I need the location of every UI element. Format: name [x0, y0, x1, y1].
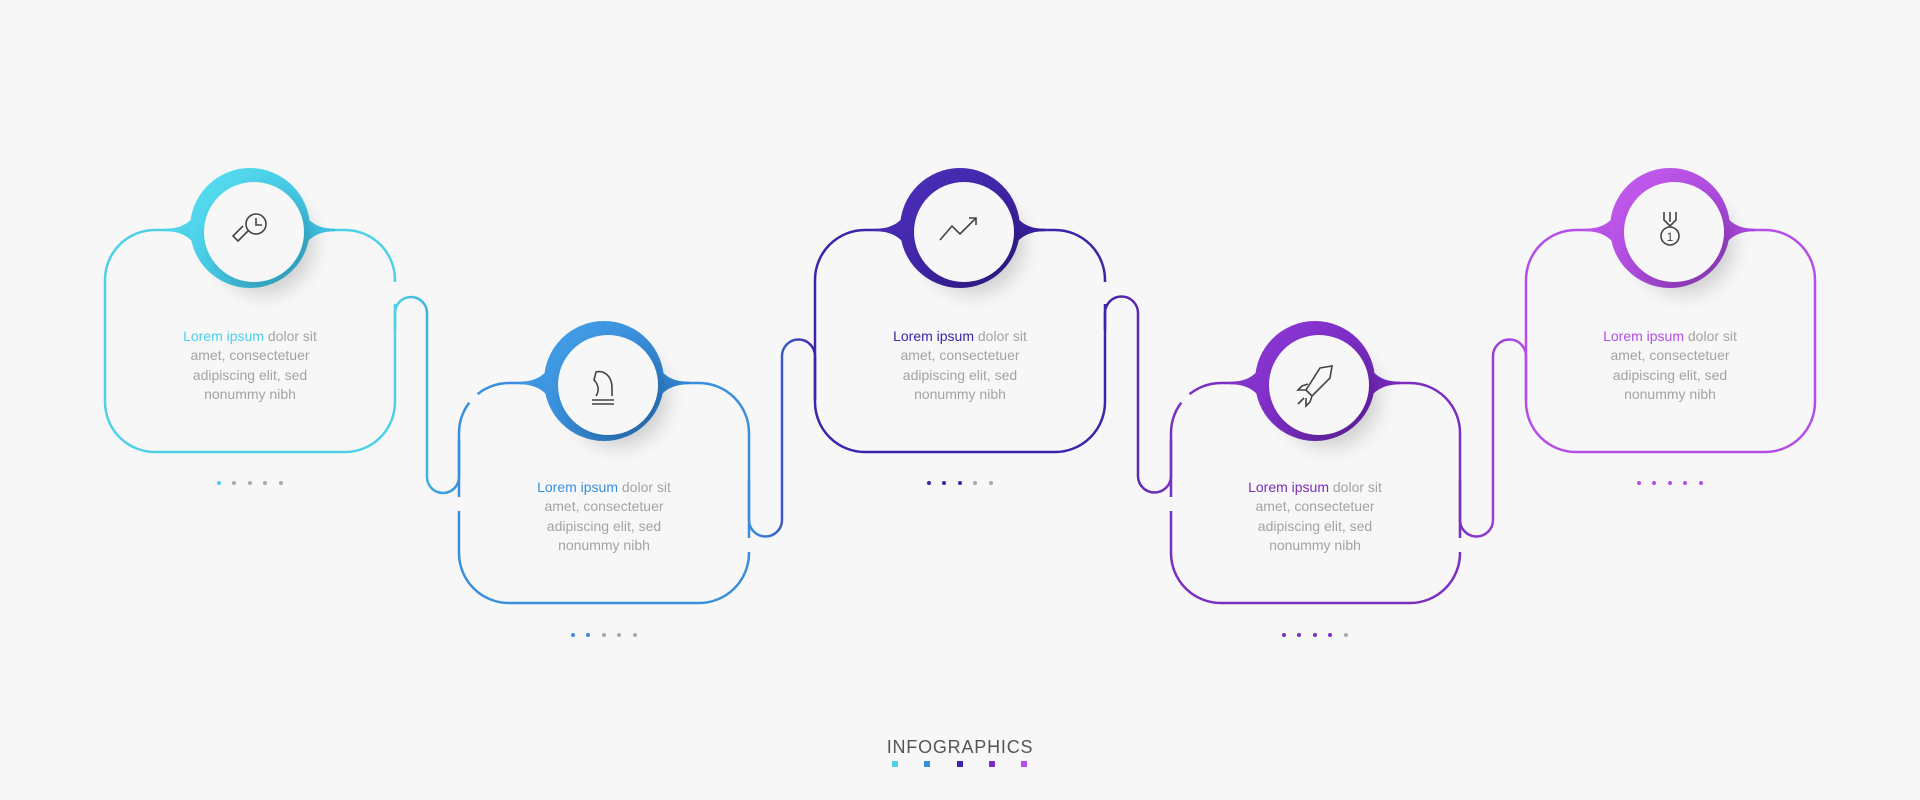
text 3: amet, consectetuer: [900, 347, 1020, 363]
text 3: adipiscing elit, sed: [903, 367, 1017, 383]
text 1: [183, 328, 317, 402]
text 4: adipiscing elit, sed: [1258, 518, 1372, 534]
dots 3: [927, 481, 993, 485]
icon: medal: [1661, 212, 1679, 245]
panel 2 outline: [459, 383, 749, 603]
text 3: [893, 328, 1027, 402]
step 3 badge: [875, 168, 1045, 288]
dots 2: [571, 633, 637, 637]
text 4: Lorem ipsum dolor sit: [1248, 479, 1382, 495]
icon: medal: 1: [1667, 230, 1674, 244]
step 4 badge: [1230, 321, 1400, 441]
color legend squares: [892, 761, 1027, 767]
text 1: amet, consectetuer: [190, 347, 310, 363]
step 2 badge: [519, 321, 689, 441]
panel 1 outline: [105, 230, 395, 452]
title: INFOGRAPHICS: [887, 737, 1033, 757]
text 1: nonummy nibh: [204, 386, 296, 402]
text 2: amet, consectetuer: [544, 498, 664, 514]
text 2: Lorem ipsum dolor sit: [537, 479, 671, 495]
text 5: nonummy nibh: [1624, 386, 1716, 402]
text 4: amet, consectetuer: [1255, 498, 1375, 514]
text 1: Lorem ipsum dolor sit: [183, 328, 317, 344]
text 3: nonummy nibh: [914, 386, 1006, 402]
dots 4: [1282, 633, 1348, 637]
text 5: adipiscing elit, sed: [1613, 367, 1727, 383]
dots 5: [1637, 481, 1703, 485]
icon: trend arrow: [940, 218, 976, 240]
text 1: adipiscing elit, sed: [193, 367, 307, 383]
icon: chess knight: [592, 372, 614, 404]
panel 4 outline: [1171, 383, 1460, 603]
step 5 badge: [1585, 168, 1755, 288]
text 5: Lorem ipsum dolor sit: [1603, 328, 1737, 344]
dots 1: [217, 481, 283, 485]
text 2: adipiscing elit, sed: [547, 518, 661, 534]
text 4: nonummy nibh: [1269, 537, 1361, 553]
connector 2: [749, 340, 815, 536]
text 2: nonummy nibh: [558, 537, 650, 553]
text 3: Lorem ipsum dolor sit: [893, 328, 1027, 344]
panel 3 outline: [815, 230, 1105, 452]
text 2: [537, 479, 671, 553]
step 1 badge: [165, 168, 335, 288]
connector 1: [395, 297, 459, 493]
text 5: amet, consectetuer: [1610, 347, 1730, 363]
connector 4: [1460, 340, 1526, 536]
icon: magnifier clock: [233, 214, 266, 241]
panel 5 outline: [1526, 230, 1815, 452]
icon: rocket: [1298, 366, 1332, 406]
text 5: [1603, 328, 1737, 402]
connector 3: [1105, 297, 1171, 493]
text 4: [1248, 479, 1382, 553]
